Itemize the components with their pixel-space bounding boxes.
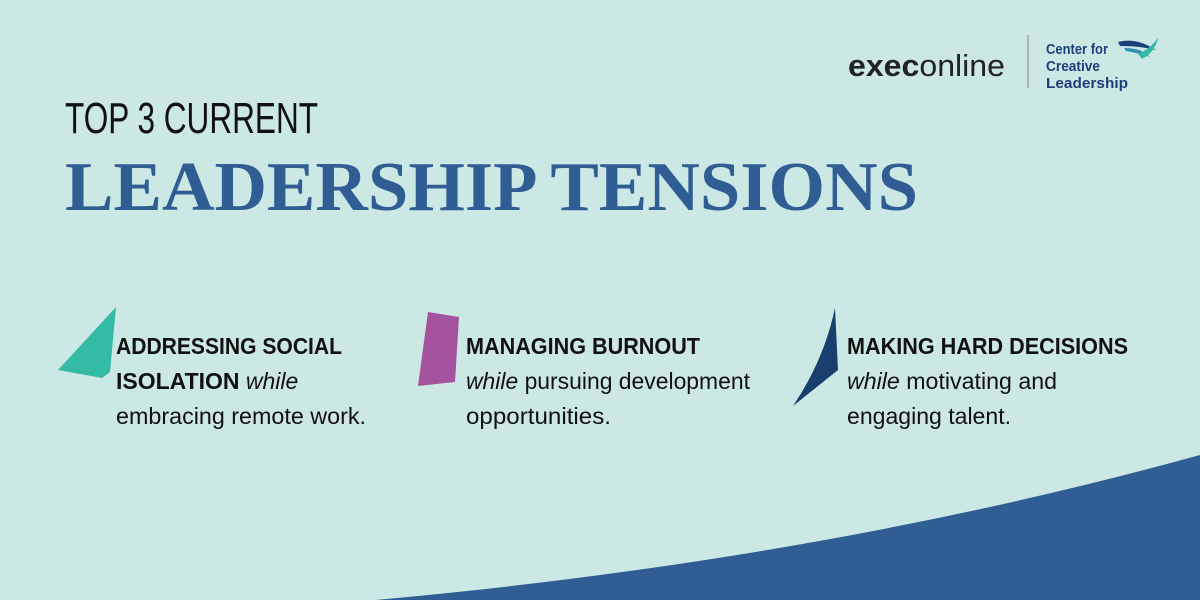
text: hard decisions: MAKING HARD DECISIONS	[847, 333, 1128, 359]
text: social isolation: embracing remote work.	[116, 403, 366, 429]
text: burnout: while pursuing development	[466, 368, 751, 394]
logo: Center for Creative Leadership: Center for	[1046, 42, 1108, 58]
title: top 3 current: TOP 3 CURRENT	[65, 94, 318, 143]
panel: hard decisions	[793, 308, 1128, 429]
bottom wave	[375, 455, 1200, 600]
logo: Center for Creative Leadership: Leadership	[1046, 76, 1128, 92]
panel: burnout	[418, 312, 751, 429]
text: burnout	[466, 333, 751, 429]
text: hard decisions: while motivating and	[847, 368, 1057, 394]
logo: Center for Creative Leadership: Creative	[1046, 59, 1100, 75]
icon: teal shape	[58, 307, 116, 378]
text: burnout: opportunities.	[466, 403, 611, 429]
panel: social isolation	[58, 307, 366, 429]
logo: Center for Creative Leadership	[1046, 38, 1158, 92]
icon: purple shape	[418, 312, 459, 386]
text: hard decisions	[847, 333, 1128, 429]
text: hard decisions: engaging talent.	[847, 403, 1011, 429]
text: social isolation	[116, 333, 366, 429]
text: burnout: MANAGING BURNOUT	[466, 333, 700, 359]
text: social isolation: ISOLATION while	[116, 368, 298, 394]
icon: swoosh	[1118, 38, 1158, 59]
text: social isolation: ADDRESSING SOCIAL	[116, 333, 342, 359]
logo: execonline: execonline	[848, 48, 1005, 83]
title: leadership tensions: LEADERSHIP TENSIONS	[65, 149, 918, 226]
icon: navy shape	[793, 308, 838, 406]
